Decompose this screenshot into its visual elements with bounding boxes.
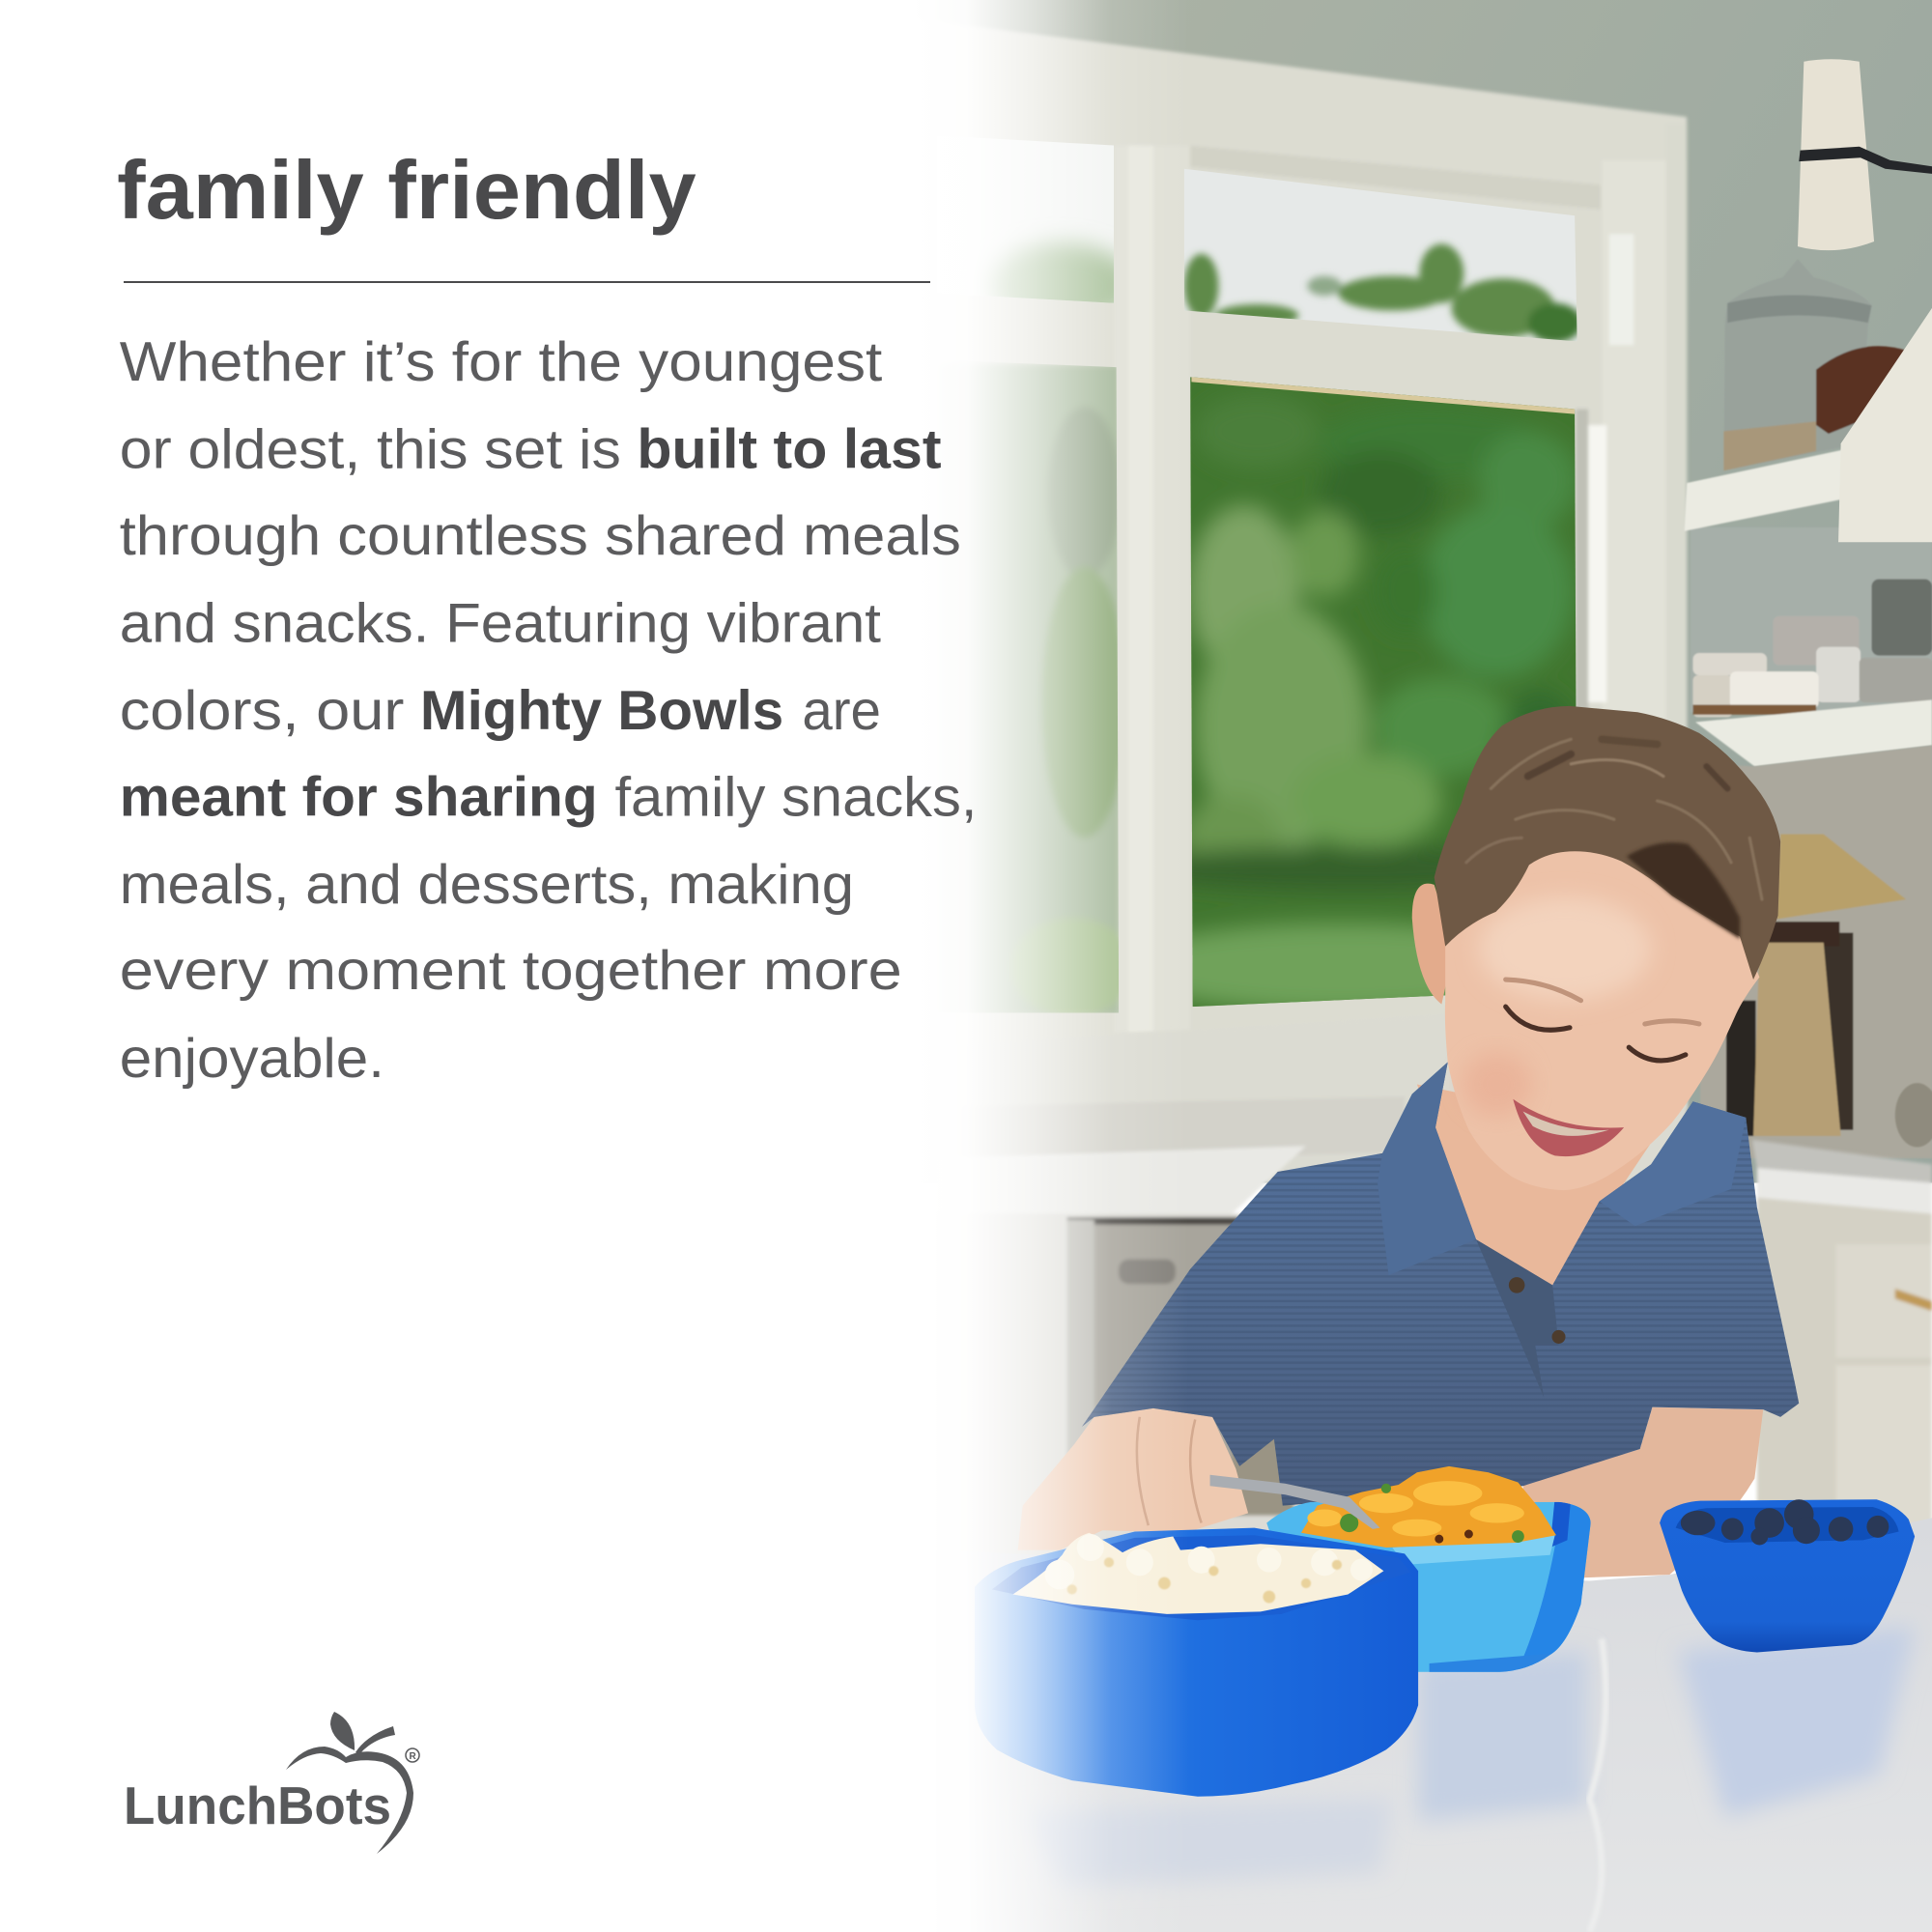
- body text: [120, 331, 977, 1090]
- shelves and dishes: [1685, 450, 1932, 766]
- boy: eyes: [1506, 1007, 1686, 1061]
- boy: shirt knit texture: [1082, 1062, 1799, 1506]
- window lower left pane: [987, 363, 1119, 1012]
- body text: meant for sharing: [120, 766, 598, 828]
- boy: mouth: [1513, 1099, 1624, 1156]
- boy: forehead highlight: [1479, 897, 1651, 1001]
- backsplash and table lamp: [1700, 746, 1932, 1158]
- lamp sconce: [1798, 59, 1932, 250]
- wall: [912, 0, 1932, 1182]
- window upper right pane: [1184, 169, 1577, 341]
- boy: far arm: [1523, 1407, 1763, 1579]
- body text: colors, our: [120, 680, 404, 742]
- body text: and snacks. Featuring vibrant: [120, 593, 881, 655]
- boy: collar and placket: [1378, 1062, 1746, 1397]
- boy: hair shadow: [1627, 842, 1740, 939]
- boy: neck: [1417, 1084, 1658, 1285]
- registered mark: R: [410, 1751, 417, 1762]
- boy: near forearm and hand: [1018, 1408, 1248, 1550]
- window upper left pane: [998, 139, 1114, 303]
- white fade over photo left edge: [905, 0, 1195, 1932]
- logo leaf: [330, 1712, 355, 1750]
- body text: every moment together more: [120, 940, 902, 1002]
- boy: hair texture: [1466, 739, 1762, 899]
- body text: meals, and desserts, making: [120, 854, 854, 916]
- logo apple outline: [286, 1747, 413, 1854]
- body text: or oldest, this set is: [120, 419, 621, 481]
- blueberries: [1681, 1499, 1889, 1545]
- body text: are: [802, 680, 881, 742]
- small bowl: body: [1660, 1499, 1915, 1652]
- small bowl with blueberries: [1660, 1499, 1915, 1652]
- body text: family snacks,: [614, 766, 977, 828]
- body text: through countless shared meals: [120, 505, 961, 567]
- range hood: [1838, 308, 1932, 542]
- back bowl: body: [1266, 1501, 1591, 1672]
- logo stem: [355, 1726, 395, 1754]
- body text: built to last: [637, 419, 941, 481]
- boy: finger creases: [1137, 1417, 1202, 1525]
- front bowl: body: [975, 1528, 1418, 1797]
- lower wall and counter: [912, 998, 1932, 1571]
- boy: face: [1445, 850, 1759, 1190]
- body text: enjoyable.: [120, 1028, 384, 1090]
- glass jar on shelf: [1723, 259, 1909, 470]
- front bowl: inside rim: [992, 1535, 1410, 1620]
- boy: cheek blush: [1463, 1052, 1531, 1117]
- spoon: [1210, 1475, 1380, 1529]
- boy: eyebrows: [1506, 980, 1699, 1024]
- title divider: [124, 281, 930, 283]
- body text: Mighty Bowls: [420, 680, 783, 742]
- boy: hair: [1435, 706, 1780, 980]
- window frame: [912, 18, 1687, 1171]
- boy: [1018, 706, 1799, 1579]
- small bowl: inside: [1676, 1507, 1899, 1543]
- boy: polo shirt: [1082, 1062, 1799, 1506]
- title: family friendly: [117, 145, 696, 237]
- body text: Whether it’s for the youngest: [120, 331, 882, 393]
- back bowl: macaroni: [1301, 1466, 1556, 1548]
- logo wordmark: LunchBots: [124, 1776, 391, 1835]
- window lower right pane with trees: [1190, 377, 1577, 1007]
- back bowl with macaroni: [1210, 1466, 1602, 1688]
- logo: LunchBots: [124, 1712, 419, 1854]
- registered mark: [406, 1748, 419, 1762]
- front bowl with white macaroni: [975, 1528, 1418, 1797]
- boy: ear: [1412, 884, 1454, 1005]
- tabletop: [936, 1518, 1932, 1932]
- front bowl: pasta: [1012, 1533, 1383, 1614]
- photo: boy eating from bowls in a kitchen: [975, 0, 1932, 1932]
